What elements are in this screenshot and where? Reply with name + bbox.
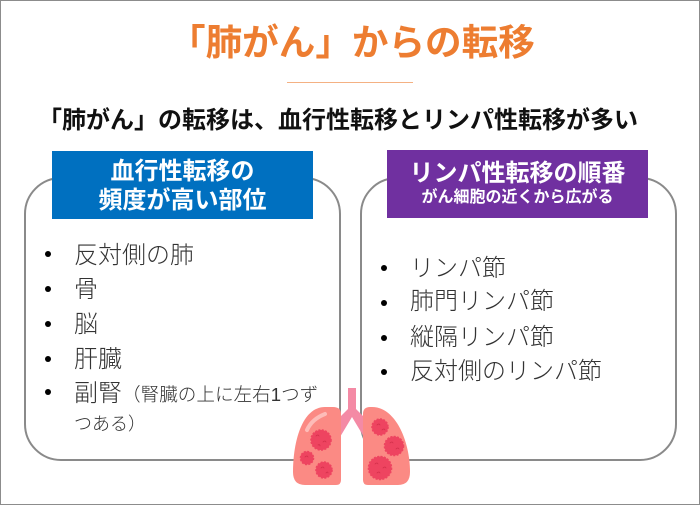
list: lymphatic order: 反対側のリンパ節 [410, 358, 602, 385]
heading: hematogenous sites: 頻度が高い部位 [98, 187, 266, 214]
list: lymphatic order: リンパ節 [410, 255, 506, 282]
heading: hematogenous sites [52, 151, 313, 219]
heading: lymphatic order [387, 150, 648, 218]
list: lymphatic order: 肺門リンパ節 [410, 288, 554, 315]
list: hematogenous sites: 骨 [74, 276, 98, 303]
list: lymphatic order [381, 255, 602, 385]
list: hematogenous sites: 脳 [74, 311, 98, 338]
panel: lymphatic metastasis [360, 177, 677, 461]
subtitle: 「肺がん」の転移は、血行性転移とリンパ性転移が多い [38, 107, 638, 134]
icon: lungs with tumors [293, 388, 410, 485]
list: hematogenous sites: 副腎（腎臓の上に左右1つず [74, 380, 318, 407]
list: lymphatic order: 縦隔リンパ節 [410, 324, 554, 351]
list: hematogenous sites: つある） [74, 414, 146, 434]
heading: lymphatic order: がん細胞の近くから広がる [421, 189, 614, 206]
list: hematogenous sites [45, 242, 318, 434]
panel: hematogenous metastasis [24, 177, 341, 461]
list: hematogenous sites: 肝臓 [74, 346, 122, 373]
heading: hematogenous sites: 血行性転移の [110, 158, 254, 185]
list: hematogenous sites: 反対側の肺 [74, 242, 194, 269]
heading: lymphatic order: リンパ性転移の順番 [410, 160, 626, 187]
title: 「肺がん」からの転移 [169, 22, 535, 63]
